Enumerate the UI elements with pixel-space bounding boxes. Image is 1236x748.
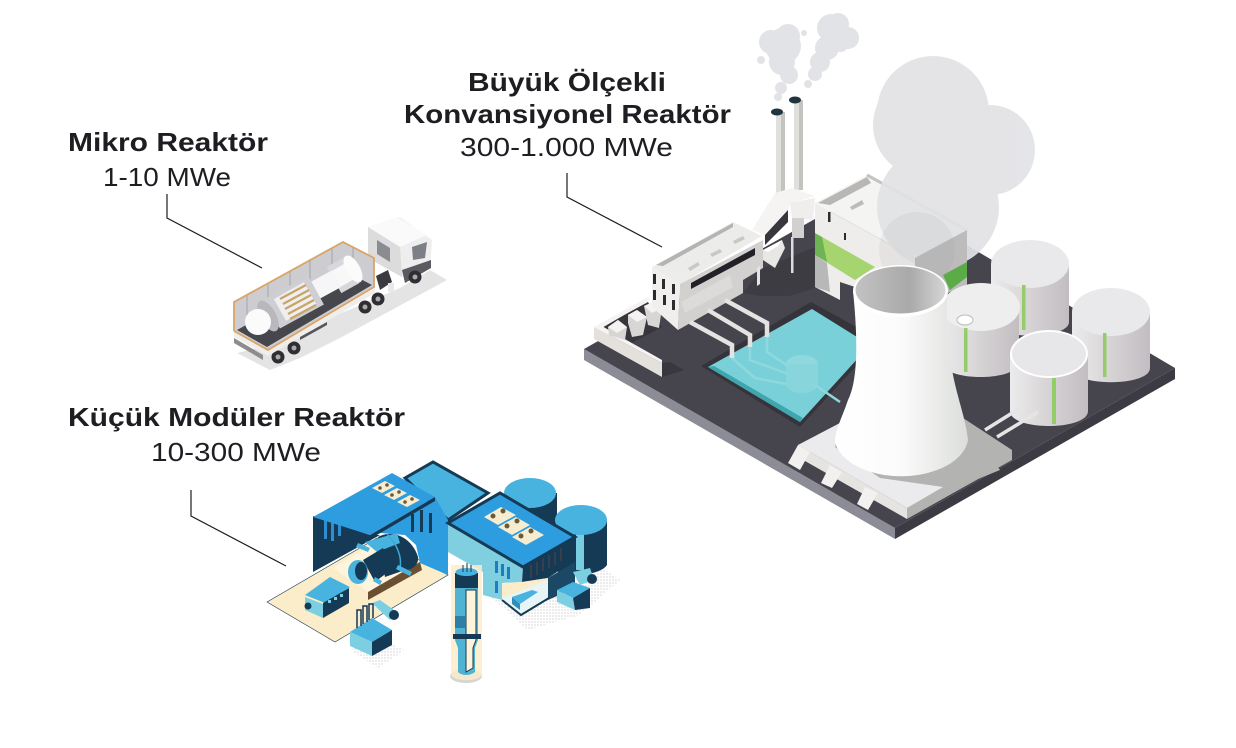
- rear tanks: [504, 478, 607, 575]
- middle roof section: [380, 462, 488, 575]
- dotted ground pads: [350, 560, 620, 668]
- illustration: small modular reactor: [267, 462, 620, 683]
- container walls: [234, 242, 374, 350]
- leader line: micro reactor: [167, 194, 262, 268]
- orange frame: [234, 242, 374, 350]
- reactor hall walls and roof: [815, 175, 967, 330]
- truck cab: [368, 217, 432, 292]
- transformer left: [350, 600, 399, 656]
- generator unit: [304, 577, 350, 618]
- translucent lower smoke: [879, 212, 955, 288]
- trailer edge: [234, 288, 375, 356]
- illustration: micro reactor on truck: [234, 217, 447, 370]
- heading: Küçük Modüler Reaktör: Küçük Modüler Reaktör: [68, 402, 405, 432]
- container floor: [237, 271, 372, 347]
- storage tank: left: [942, 283, 1020, 377]
- platform base: [584, 188, 1175, 539]
- heading: Mikro Reaktör: Mikro Reaktör: [68, 127, 268, 157]
- discharge pipes: [690, 300, 767, 358]
- chimney smoke: [757, 13, 859, 101]
- pool: [701, 302, 880, 427]
- fan hubs: [378, 483, 414, 504]
- heading: Mikro Reaktör: 1-10 MWe: [103, 162, 231, 192]
- storage tank: right: [1072, 288, 1150, 382]
- turbine hall: [313, 473, 435, 572]
- turbine generator: [333, 533, 422, 600]
- heading: Büyük Ölçekli Konvansiyonel Reaktör: [404, 67, 731, 162]
- connector and conveyor: [752, 188, 815, 273]
- ground shadow: [237, 270, 447, 370]
- reactor vessel: [245, 252, 366, 335]
- heading: Büyük Ölçekli Konvansiyonel Reaktör: Büyük Ölçekli: [468, 67, 666, 97]
- transformer right: [557, 568, 597, 610]
- leader line: small modular reactor: [191, 490, 286, 566]
- heading: Büyük Ölçekli Konvansiyonel Reaktör: 300-1.000 MWe: [460, 132, 673, 162]
- wall panel seams: [247, 247, 353, 325]
- heading: Mikro Reaktör: [68, 127, 268, 192]
- cooling tower: [835, 265, 968, 476]
- side markings: [300, 322, 327, 340]
- large smoke cloud: [873, 56, 1035, 268]
- right building: [448, 493, 575, 615]
- heading: Büyük Ölçekli Konvansiyonel Reaktör: Konvansiyonel Reaktör: [404, 99, 731, 129]
- heading: Küçük Modüler Reaktör: [68, 402, 405, 467]
- slab and supports of cooling tower: [788, 418, 1012, 519]
- reactor vessel column: [450, 563, 482, 683]
- tank pipes: [985, 405, 1038, 437]
- roof fans: [372, 481, 420, 507]
- chimneys: [771, 96, 803, 202]
- heading: Küçük Modüler Reaktör: 10-300 MWe: [151, 437, 321, 467]
- trailer wheels: [272, 292, 384, 364]
- leader line: large reactor: [567, 173, 662, 247]
- left turbine building: [652, 222, 763, 330]
- reactor hall right face: [915, 230, 967, 310]
- rear bumper: [234, 338, 263, 360]
- illustration: large conventional plant: [584, 13, 1175, 539]
- storage tank: front: [1010, 330, 1088, 426]
- equipment boxes: [608, 302, 662, 340]
- storage tank: rear: [991, 240, 1069, 336]
- beige floor: [267, 538, 448, 642]
- front low wall: [594, 297, 684, 377]
